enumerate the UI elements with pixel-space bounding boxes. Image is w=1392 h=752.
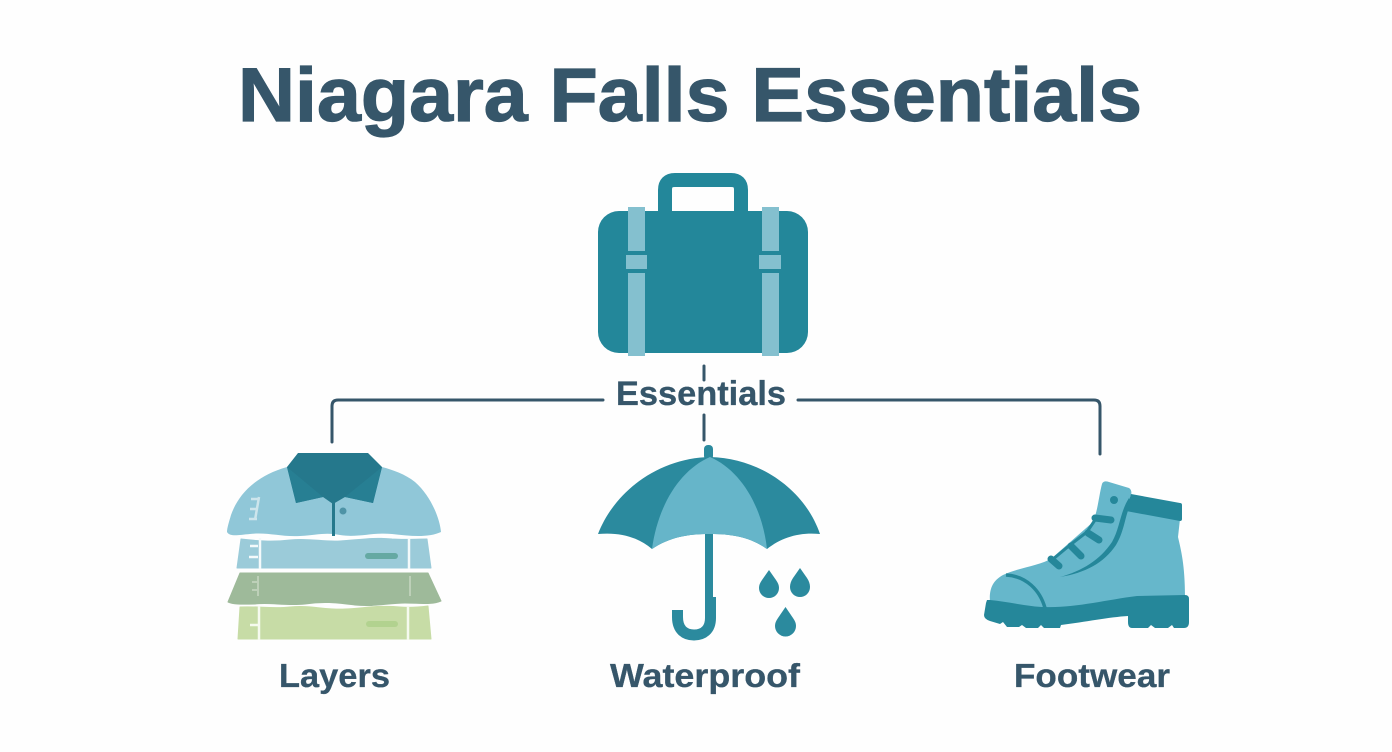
icon: hiking boot xyxy=(984,481,1189,628)
layer: light blue xyxy=(237,538,431,568)
sole xyxy=(984,595,1189,628)
collar xyxy=(1126,494,1182,521)
lace seam xyxy=(1060,498,1131,577)
finial xyxy=(704,445,713,460)
icon: suitcase xyxy=(598,180,808,356)
label: Waterproof: Waterproof xyxy=(610,657,801,694)
rain drops xyxy=(759,568,810,636)
upper xyxy=(990,481,1185,610)
shaft and handle xyxy=(705,530,713,600)
connector lines xyxy=(332,366,1100,454)
shirt body xyxy=(227,467,441,536)
label: Layers: Layers xyxy=(279,657,390,694)
shirt stitching xyxy=(249,497,259,520)
canopy xyxy=(598,457,820,549)
collar xyxy=(287,453,382,504)
layer: light green xyxy=(238,606,431,639)
layer: sage green xyxy=(228,573,441,606)
laces xyxy=(1051,518,1111,566)
shirt placket xyxy=(332,500,335,536)
icon: layered clothing xyxy=(227,453,441,640)
icon: umbrella with rain xyxy=(598,445,820,636)
label: Essentials: Essentials xyxy=(616,375,786,413)
title: Niagara Falls Essentials xyxy=(238,53,1142,138)
toe cap seam xyxy=(1006,575,1045,608)
label: Footwear: Footwear xyxy=(1014,657,1170,694)
